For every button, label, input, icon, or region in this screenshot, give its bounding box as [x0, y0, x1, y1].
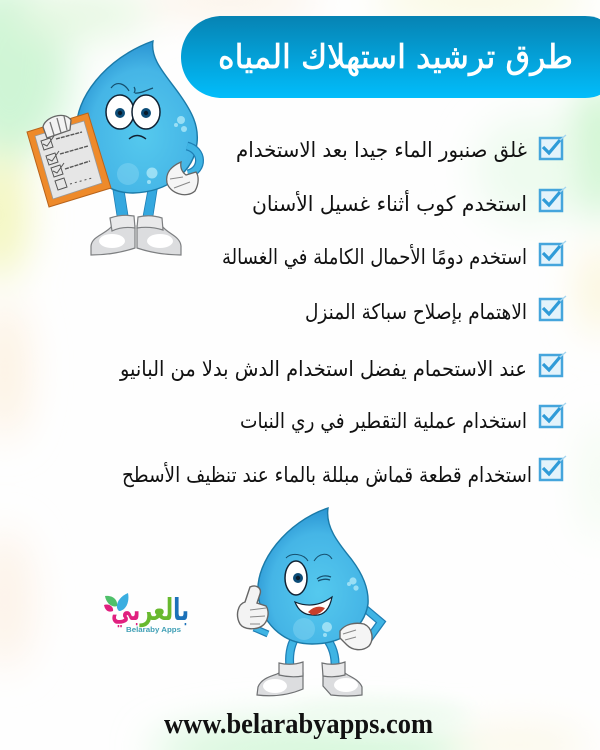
- drop shine: [117, 116, 187, 185]
- thumbs-up hand: [238, 586, 268, 629]
- drop body: [77, 41, 197, 193]
- character: worried water drop with clipboard: [27, 41, 200, 255]
- tip 6: استخدام عملية التقطير في ري النبات: [240, 409, 527, 433]
- shoes: [257, 662, 362, 696]
- tip 5: عند الاستحمام يفضل استخدام الدش بدلا من البانيو: [119, 357, 527, 381]
- logo caption: Belaraby Apps: [126, 625, 181, 634]
- legs: [290, 638, 335, 668]
- logo: Belaraby Apps: [104, 593, 189, 634]
- arms: [254, 606, 381, 640]
- drop body: [258, 508, 368, 644]
- website url: www.belarabyapps.com: [164, 708, 433, 740]
- title text: طرق ترشيد استهلاك المياه: [218, 37, 573, 76]
- tip 4: الاهتمام بإصلاح سباكة المنزل: [305, 300, 527, 325]
- shoes: [91, 215, 181, 255]
- tip 7: استخدام قطعة قماش مبللة بالماء عند تنظيف الأسطح: [122, 462, 532, 487]
- tip 3: استخدم دومًا الأحمال الكاملة في الغسالة: [222, 244, 527, 269]
- tip 1: غلق صنبور الماء جيدا بعد الاستخدام: [236, 138, 527, 162]
- hand on hip: [167, 146, 200, 195]
- face: [285, 554, 332, 615]
- character: winking water drop with thumbs up: [238, 508, 381, 696]
- clipboard: [27, 113, 111, 207]
- eyes and face: [106, 84, 160, 139]
- logo droplets: [104, 593, 128, 612]
- list of water-saving tips: [119, 135, 566, 487]
- title banner: [181, 16, 600, 98]
- tip 2: استخدم كوب أثناء غسيل الأسنان: [252, 190, 527, 216]
- drop shine: [293, 577, 359, 640]
- right hand: [340, 623, 372, 650]
- legs: [112, 183, 158, 222]
- logo wordmark: بالعربي: [111, 593, 189, 628]
